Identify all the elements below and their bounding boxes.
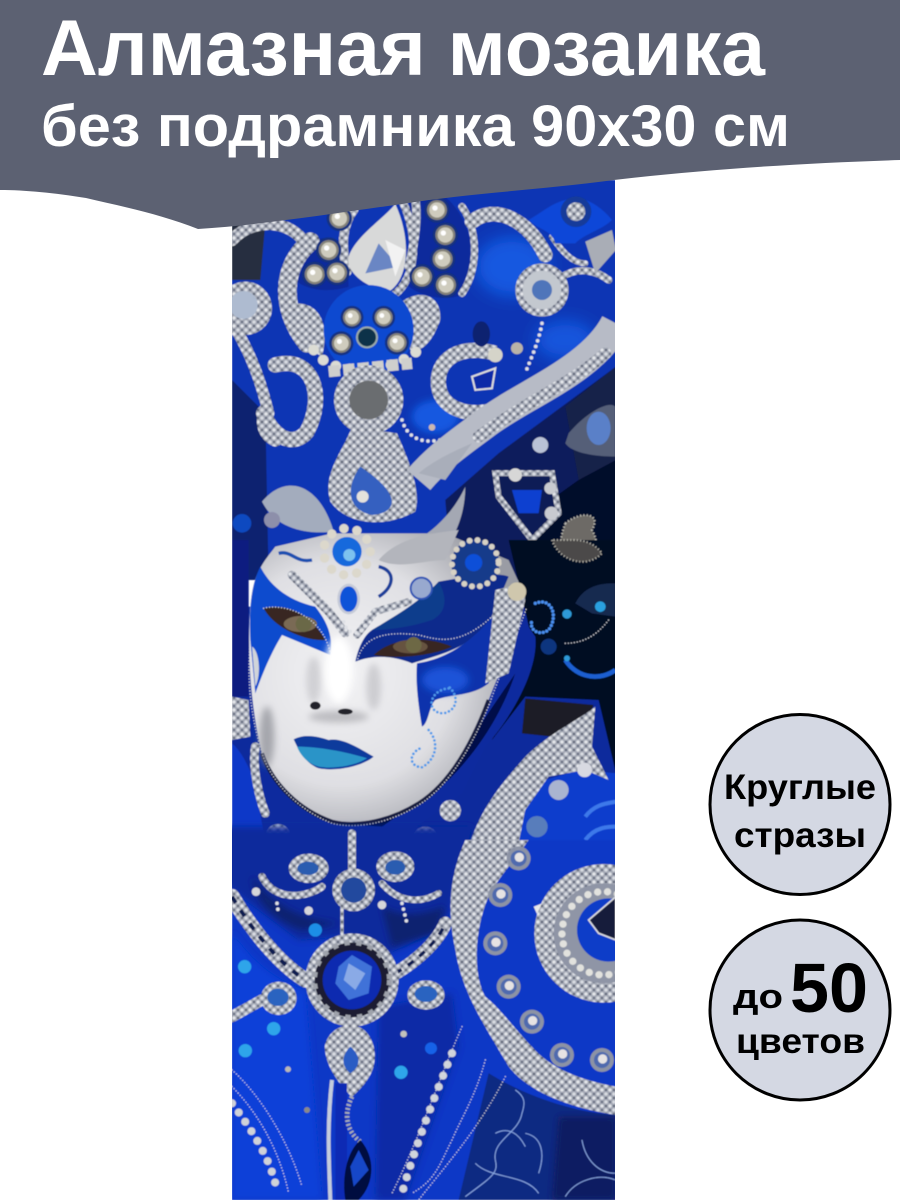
header banner — [0, 0, 900, 229]
subtitle: без подрамника 90х30 см — [41, 94, 790, 159]
artwork: venetian mask in blue and silver — [232, 180, 615, 1200]
badge: up to 50 colours — [710, 920, 890, 1100]
badge: up to 50 colours: 50 — [790, 949, 868, 1027]
badge: up to 50 colours: до — [733, 978, 783, 1016]
costume: bodice, brooch and shoulder — [232, 821, 615, 1200]
title: Алмазная мозаика — [41, 3, 766, 92]
face mask — [232, 528, 616, 861]
banner shape — [0, 0, 900, 229]
badge: round rhinestones: стразы — [734, 816, 866, 855]
badge: round rhinestones — [710, 714, 890, 894]
headdress — [219, 180, 616, 580]
badge: round rhinestones: Круглые — [724, 768, 876, 807]
badge: up to 50 colours: цветов — [736, 1022, 865, 1061]
